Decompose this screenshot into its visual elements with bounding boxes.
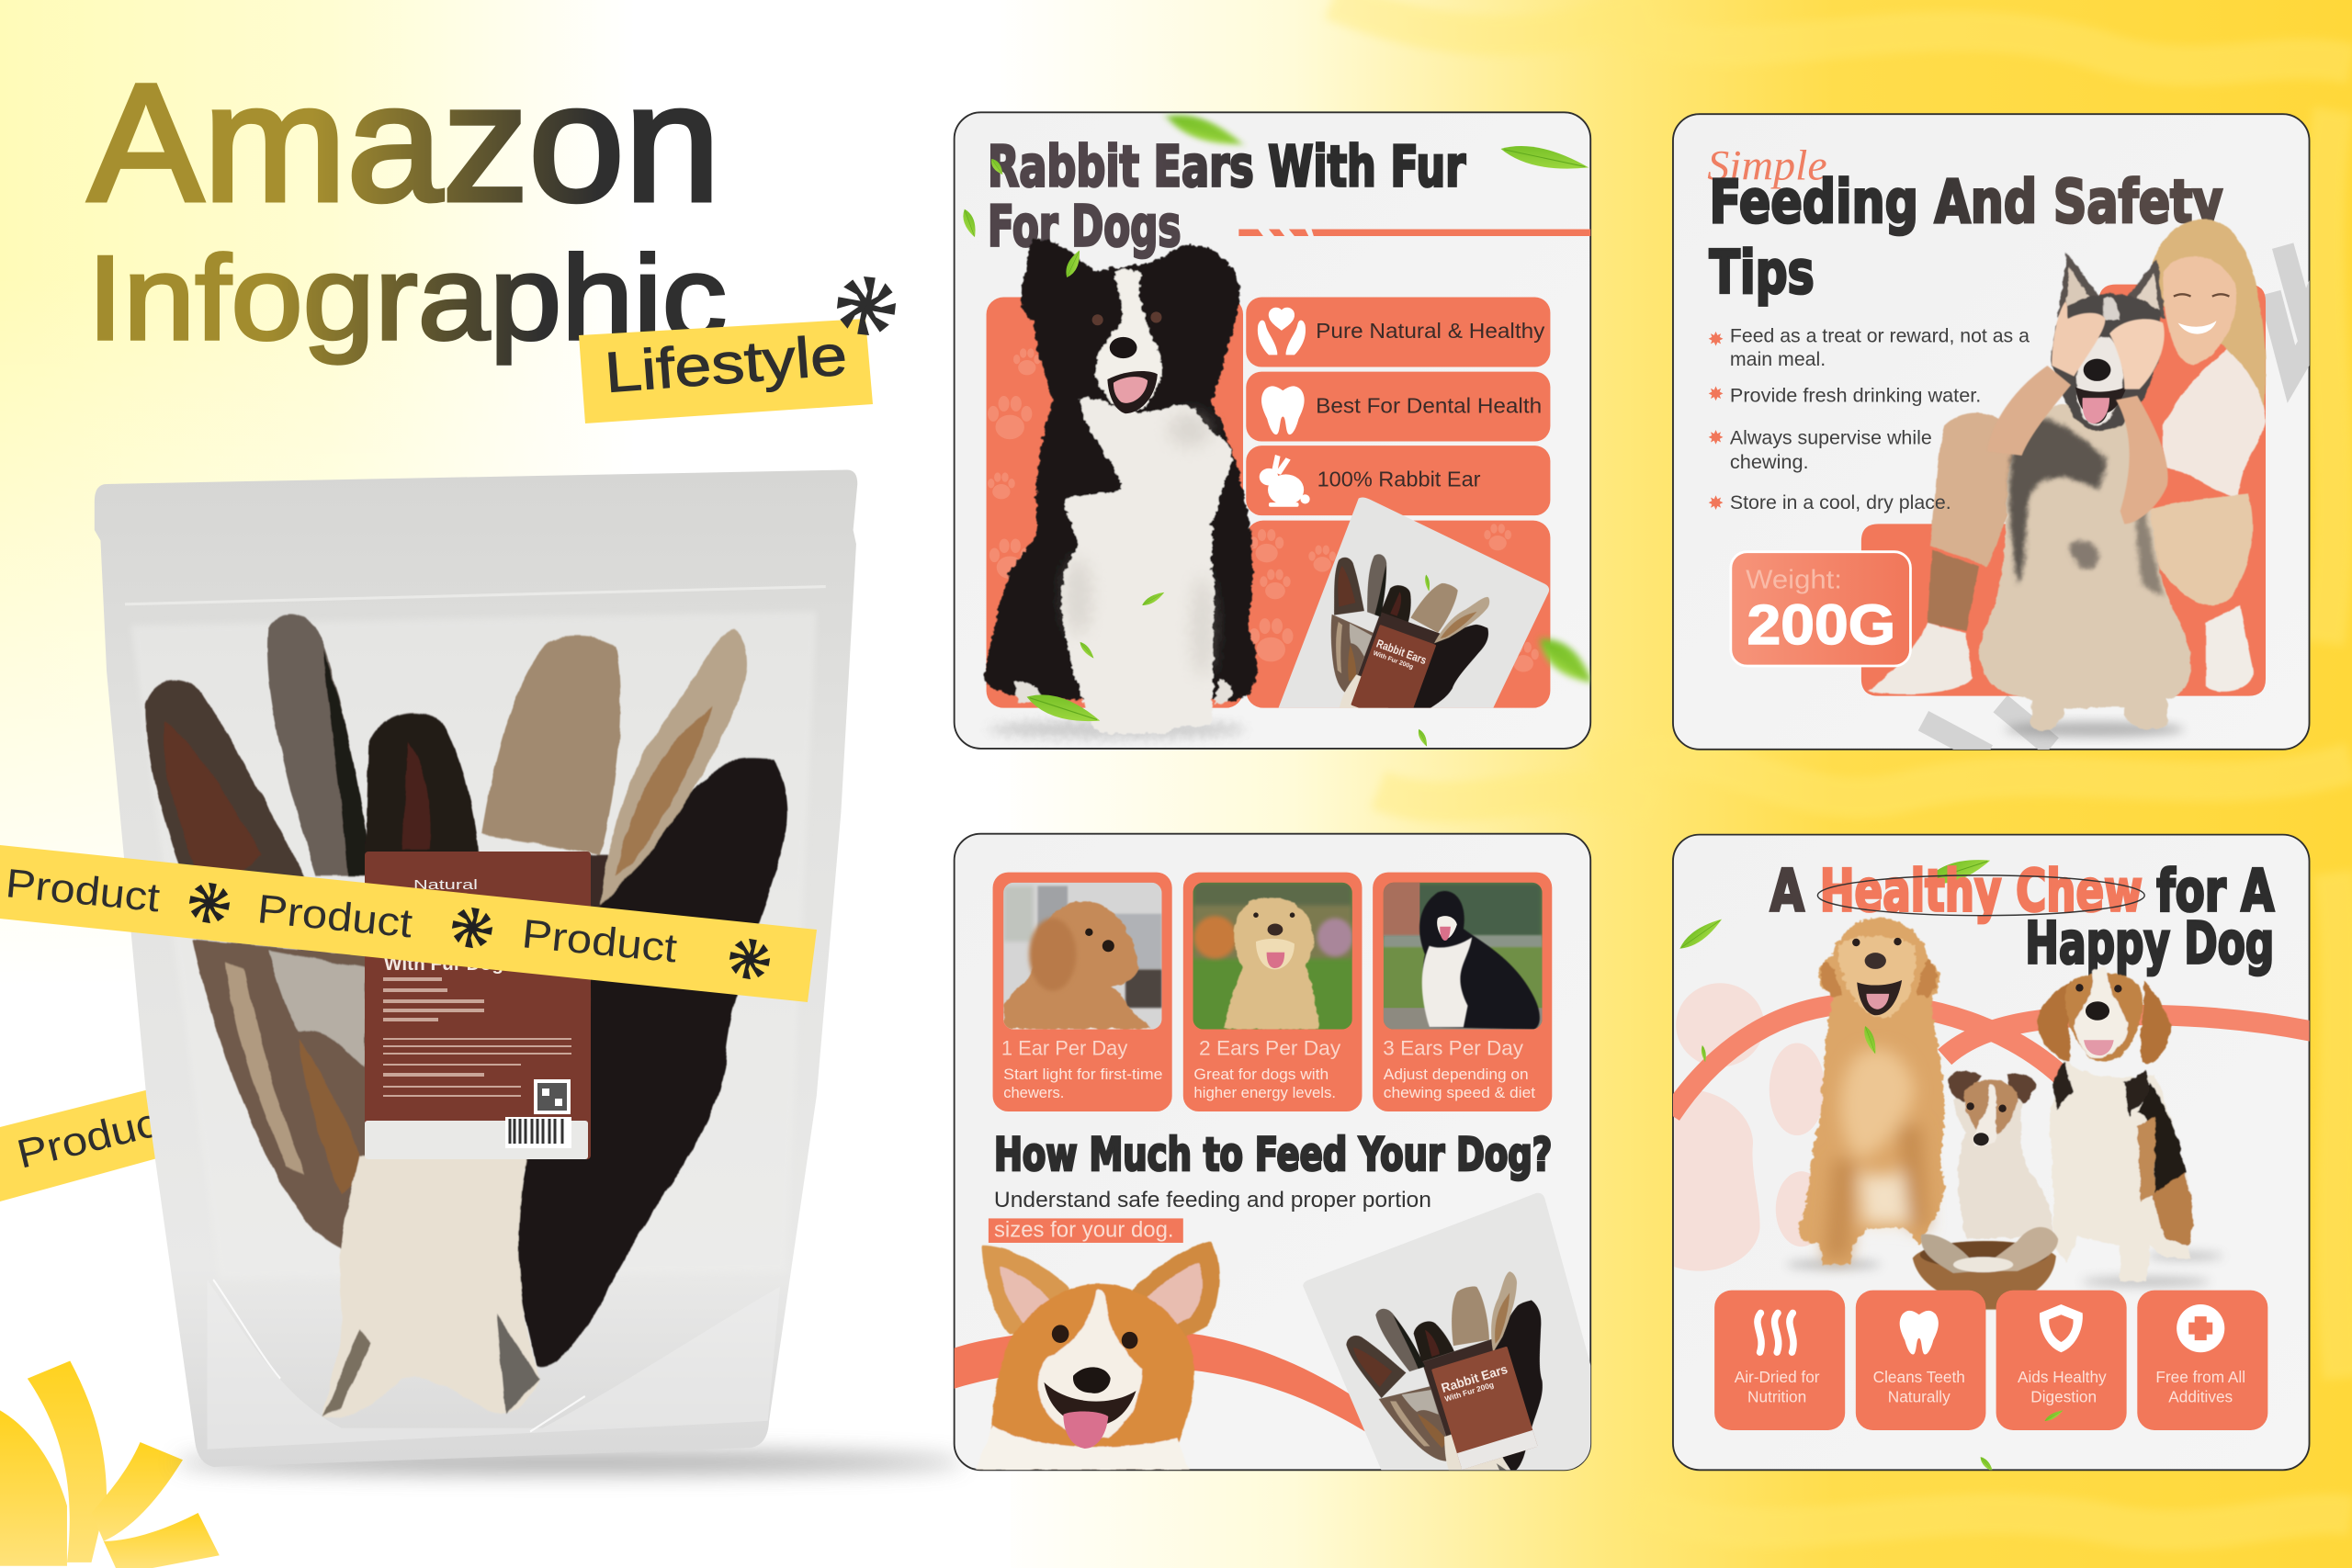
- bag shadow: [175, 1451, 965, 1473]
- benefit card: additives: Additives: [2168, 1388, 2233, 1406]
- wooden bowl with rabbit ears: [1913, 1227, 2058, 1310]
- icon: hands and heart: [1258, 308, 1306, 355]
- photo: red poodle: [1003, 883, 1162, 1030]
- icon: plus: [2177, 1304, 2224, 1352]
- border collie: [984, 239, 1258, 739]
- panel: feeding and safety tips: [1673, 114, 2322, 755]
- heading highlight: Healthy Chew: [1820, 858, 2143, 925]
- collie face details: [1092, 311, 1162, 413]
- benefit card: air dried: Air-Dried for: [1735, 1368, 1820, 1386]
- card: 3 ears per day: 3 Ears Per Day: [1383, 1036, 1524, 1059]
- panel: how much to feed: [955, 834, 1592, 1522]
- benefit card: air dried: Nutrition: [1747, 1388, 1806, 1406]
- pouch label: With Fur Dog: [384, 954, 503, 975]
- lower product strip: [0, 1087, 175, 1201]
- icon: tooth: [1900, 1311, 1939, 1355]
- terrier: [1947, 1071, 2052, 1239]
- benefit card: cleans teeth: [1856, 1291, 1985, 1430]
- panel: rabbit ears with fur: [955, 107, 1600, 768]
- feature pill: pure natural: [1246, 298, 1550, 367]
- heading words: for a: for A: [2156, 858, 2275, 925]
- heading line 2: For Dogs: [988, 195, 1181, 260]
- decorative sun blades: [0, 1360, 220, 1568]
- panel: healthy chew: [1671, 835, 2312, 1473]
- photo: golden retriever: [1193, 883, 1353, 1030]
- leaf behind heading: [1922, 852, 1993, 890]
- paw pattern: [988, 348, 1539, 672]
- script word: simple: Simple: [1707, 142, 1827, 189]
- woman with husky: [1868, 220, 2266, 737]
- card: 2 ears per day: Great for dogs with: [1193, 1066, 1329, 1083]
- floor shadows: [1786, 1252, 2222, 1287]
- highlighted subtitle: sizes for your dog.: [994, 1217, 1174, 1242]
- orange swoosh: [955, 1329, 1382, 1442]
- feature pill: dental: Best For Dental Health: [1316, 393, 1542, 417]
- upper product strip: [0, 845, 817, 1002]
- card: 2 ears per day: 2 Ears Per Day: [1199, 1036, 1341, 1059]
- card: 2 ears per day: higher energy levels.: [1193, 1084, 1336, 1101]
- tip list: [1709, 325, 2030, 513]
- feature pill: dental: [1246, 372, 1550, 442]
- upper product strip: Product: [520, 911, 679, 971]
- leaves: [1677, 915, 2064, 1473]
- benefit card: digestion: [1996, 1291, 2127, 1430]
- heading line 1: Feeding And Safety: [1710, 167, 2222, 237]
- small pouch: [1275, 497, 1549, 768]
- benefit card: digestion: Aids Healthy: [2018, 1368, 2107, 1386]
- heading line 2: Happy Dog: [2025, 909, 2274, 976]
- feature pill: rabbit ear: [1246, 446, 1550, 515]
- hand drawn ellipse: [1817, 875, 2144, 916]
- card: 1 ear per day: 1 Ear Per Day: [1001, 1036, 1128, 1059]
- tip list: Provide fresh drinking water.: [1730, 386, 1981, 407]
- card: 2 ears per day: [1183, 873, 1362, 1111]
- leaves: [960, 107, 1600, 748]
- faint pattern: [1923, 246, 2322, 755]
- pouch label: [365, 852, 591, 1159]
- orange backdrop: [1861, 285, 2266, 696]
- pouch label: [1431, 1347, 1538, 1470]
- orange backdrop: [987, 298, 1550, 708]
- weight badge: 200G: [1747, 593, 1895, 657]
- title: Infographic: Infographic: [87, 231, 727, 365]
- pouch label: Natural: [413, 877, 478, 893]
- card: 1 ear per day: [993, 873, 1172, 1111]
- tip list: chewing.: [1730, 452, 1809, 473]
- corgi: [976, 1241, 1219, 1470]
- beagle: [2037, 966, 2192, 1281]
- product pouch: [95, 470, 857, 1467]
- weight badge: Weight:: [1746, 565, 1842, 594]
- card: 3 ears per day: [1373, 873, 1552, 1111]
- heading line 1: Rabbit Ears With Fur: [988, 134, 1466, 199]
- benefit card: cleans teeth: Cleans Teeth: [1873, 1368, 1965, 1386]
- subtitle line: Understand safe feeding and proper portion: [994, 1188, 1431, 1213]
- pouch label: Rabbit Ears: [1374, 637, 1428, 667]
- golden retriever: [1797, 918, 1945, 1265]
- tip list: main meal.: [1730, 349, 1826, 370]
- heading: How Much to Feed Your Dog?: [994, 1127, 1552, 1181]
- lifestyle tag: Lifestyle: [603, 323, 849, 405]
- icon: steam: [1758, 1313, 1793, 1352]
- lifestyle tag: [579, 319, 873, 423]
- tip list: Store in a cool, dry place.: [1730, 492, 1951, 513]
- orange arcs: [1671, 1003, 2312, 1115]
- feature pill: rabbit ear: 100% Rabbit Ear: [1317, 467, 1481, 491]
- card: 3 ears per day: Adjust depending on: [1384, 1066, 1529, 1083]
- tip list: Feed as a treat or reward, not as a: [1730, 325, 2030, 346]
- weight badge: [1731, 552, 1910, 666]
- benefit card: additives: Free from All: [2155, 1368, 2245, 1386]
- benefit card: cleans teeth: Naturally: [1888, 1388, 1951, 1406]
- lower product strip: Product: [13, 1097, 175, 1178]
- icon: pinwheel star: [831, 271, 901, 341]
- upper product strip: Product: [4, 861, 162, 920]
- pouch label: With Fur 200g: [1372, 650, 1414, 671]
- icon: shield: [2040, 1304, 2083, 1352]
- benefit card: additives: [2137, 1291, 2267, 1430]
- photo: australian shepherd: [1384, 883, 1543, 1030]
- pouch label: [1351, 625, 1436, 726]
- tip list: Always supervise while: [1730, 427, 1932, 448]
- heading line 2: Tips: [1710, 238, 1815, 308]
- heading word: a: A: [1770, 858, 1804, 925]
- upper product strip: Product: [255, 886, 414, 946]
- icon: tooth: [1261, 386, 1305, 434]
- benefit card: air dried: [1714, 1291, 1845, 1430]
- card: 1 ear per day: Start light for first-time: [1003, 1066, 1162, 1083]
- card: 1 ear per day: chewers.: [1003, 1084, 1064, 1101]
- pouch label: With Fur 200g: [1443, 1380, 1495, 1404]
- feature pill: pure natural: Pure Natural & Healthy: [1316, 319, 1545, 343]
- tilted pouch: [1303, 1193, 1592, 1522]
- icon: rabbit: [1260, 455, 1310, 507]
- benefit card: digestion: Digestion: [2030, 1388, 2097, 1406]
- pouch label: Rabbit Ears: [1440, 1361, 1510, 1395]
- title: Amazon: Amazon: [88, 49, 720, 236]
- card: 3 ears per day: chewing speed & diet: [1384, 1084, 1535, 1101]
- pale paw shape: [1674, 983, 1827, 1271]
- accent line: [1238, 230, 1590, 236]
